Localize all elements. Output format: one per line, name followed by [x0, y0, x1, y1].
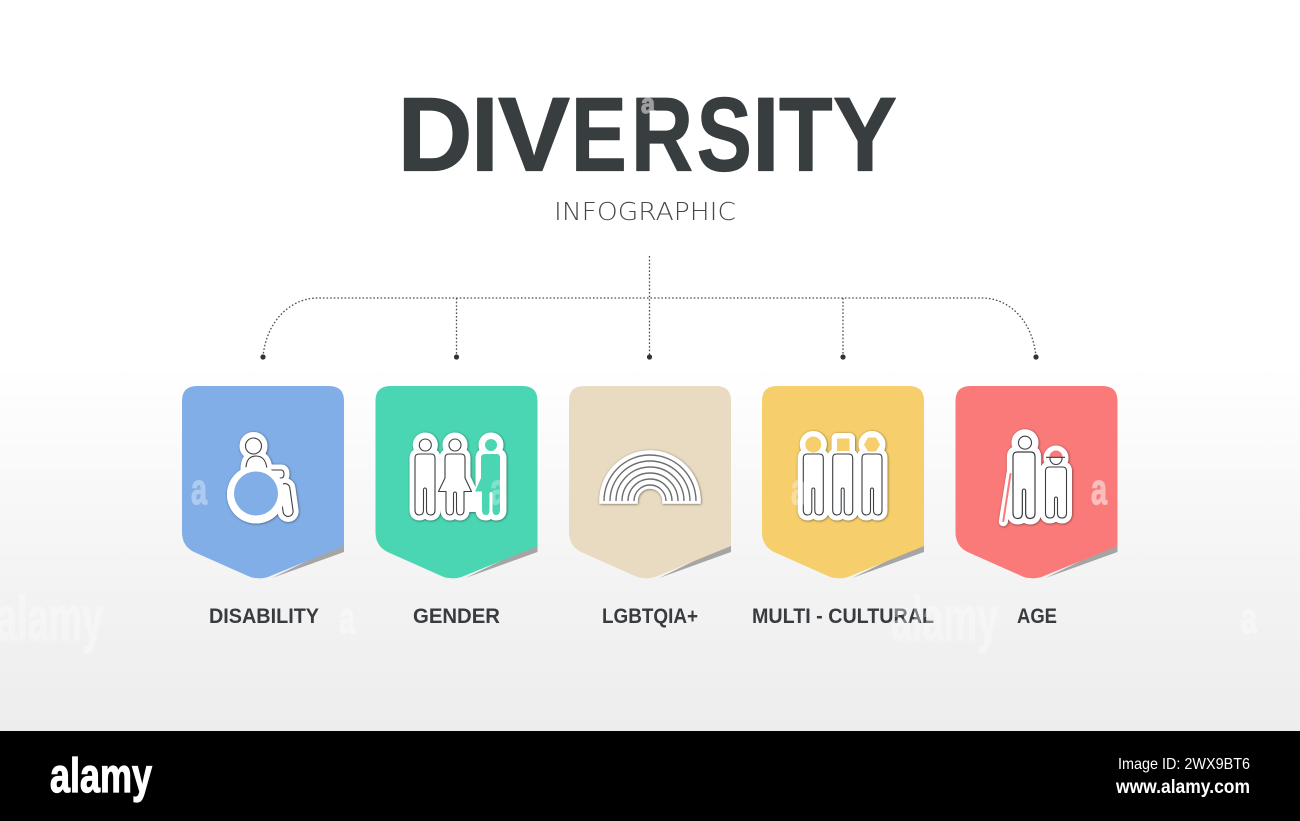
panel: lgbtqia	[569, 386, 731, 628]
label: gender: GENDER	[413, 605, 500, 628]
footer logo: alamy	[50, 750, 152, 803]
title: S	[697, 76, 752, 194]
badge: multi-cultural	[762, 386, 924, 578]
watermark: a	[641, 88, 655, 119]
label: multi-cultural: MULTI - CULTURAL	[752, 605, 934, 628]
watermark: a	[191, 465, 207, 514]
subtitle: INFOGRAPHIC	[554, 197, 736, 226]
footer bar	[0, 731, 1300, 821]
panel: gender	[376, 386, 538, 628]
badge: gender	[376, 386, 538, 578]
icon: wheelchair user	[227, 438, 294, 524]
watermark: alamy	[891, 585, 998, 654]
panel: age	[956, 386, 1118, 628]
title: V	[498, 76, 570, 194]
title: Y	[833, 76, 897, 194]
watermark: a	[791, 465, 807, 514]
badge: lgbtqia	[569, 386, 731, 578]
watermark: a	[1241, 594, 1257, 643]
label: lgbtqia: LGBTQIA+	[602, 605, 698, 628]
icon: gender figures	[415, 438, 501, 515]
title: D	[398, 76, 472, 194]
watermark	[0, 88, 1257, 654]
icon: three people	[803, 436, 882, 515]
icon: elder and child	[1003, 435, 1066, 522]
icon: rainbow	[600, 451, 700, 503]
watermark: a	[490, 465, 506, 514]
badge: age	[956, 386, 1118, 578]
title: I	[752, 76, 780, 194]
panel: disability	[182, 386, 344, 628]
website: www.alamy.com	[1115, 777, 1250, 798]
image id: Image ID: 2WX9BT6	[1118, 756, 1250, 773]
watermark: a	[339, 594, 355, 643]
panel: multi-cultural	[752, 386, 934, 628]
title: R	[631, 76, 693, 194]
badge: disability	[182, 386, 344, 578]
watermark: alamy	[0, 585, 103, 654]
title: T	[779, 76, 833, 194]
title: E	[571, 76, 627, 194]
label: age: AGE	[1017, 605, 1057, 628]
watermark: a	[1091, 465, 1107, 514]
connector tree	[260, 256, 1039, 360]
label: disability: DISABILITY	[209, 605, 319, 628]
title: I	[471, 76, 499, 194]
